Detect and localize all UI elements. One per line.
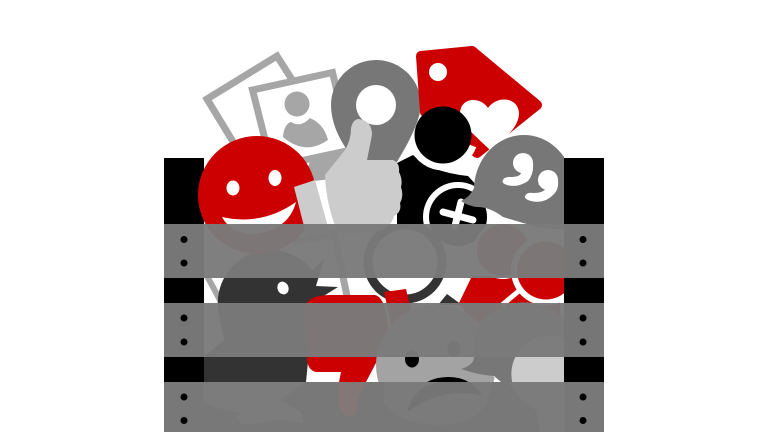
icon: lower photo frames	[204, 278, 350, 302]
icon: back photo frame	[207, 56, 331, 186]
slat: middle	[164, 303, 604, 357]
icon: location pin	[331, 60, 421, 190]
right crate post	[564, 158, 604, 432]
crate slats	[164, 224, 604, 432]
slat: bottom with faint shapes	[164, 382, 604, 432]
icon: person with plus badge	[397, 106, 493, 252]
icon: dark smiley bird shape	[204, 278, 338, 382]
icon: thumb up	[294, 119, 402, 238]
lower icons inside crate	[204, 224, 564, 382]
icon: speech bubble with quotes	[461, 135, 564, 229]
icon: red heart and circle cluster	[459, 224, 564, 324]
slat: top	[164, 224, 604, 278]
icon: lower speech bubble	[462, 302, 564, 382]
left crate post	[164, 158, 204, 432]
crate illustration	[164, 46, 604, 432]
icon: small dark triangle	[440, 294, 459, 303]
icon: thumb down	[304, 289, 419, 382]
icon: red smiley	[198, 136, 316, 254]
icon: dark ring	[368, 225, 442, 299]
icon: sad face	[376, 341, 495, 382]
icon: price tag with heart	[421, 51, 537, 153]
icon: front photo with person	[252, 72, 351, 182]
nails	[180, 236, 586, 424]
